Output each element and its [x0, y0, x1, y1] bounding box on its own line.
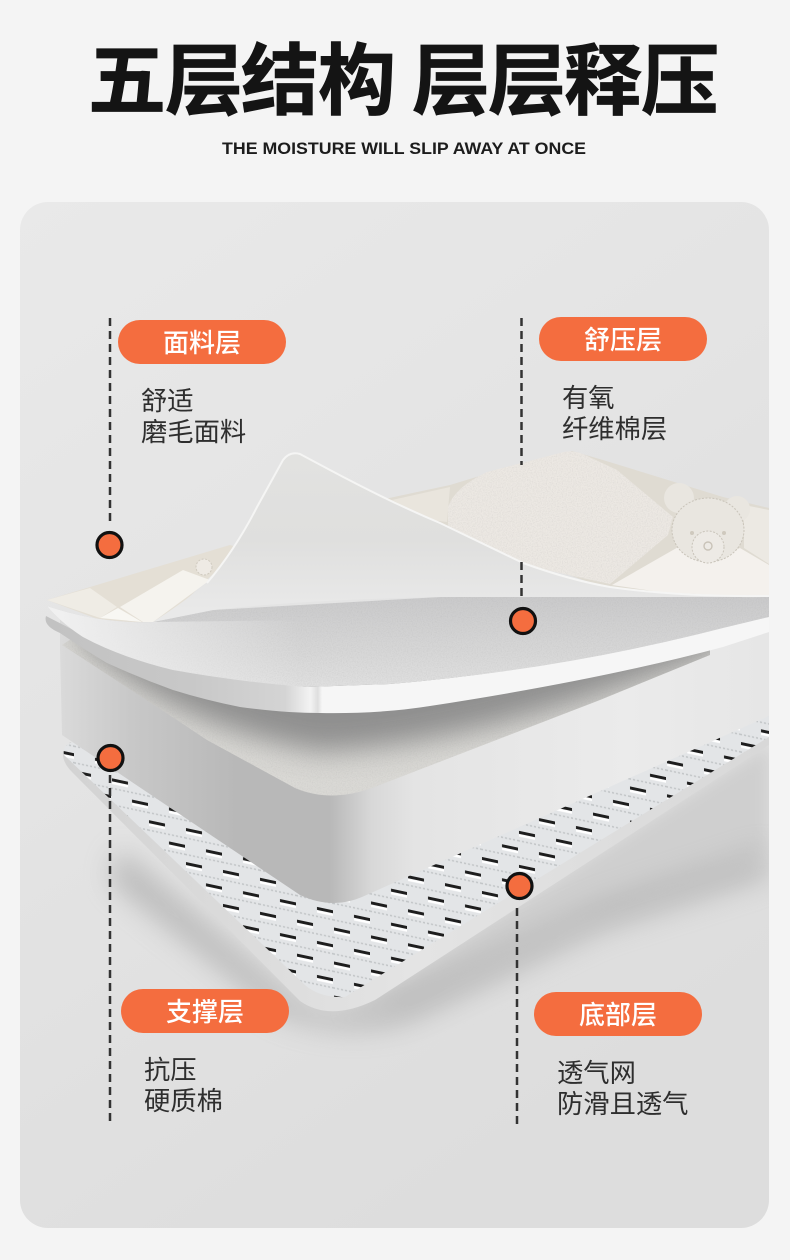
left small quilt panel: [392, 487, 450, 522]
marker dot: [510, 608, 536, 634]
label pill: [539, 317, 707, 361]
title: 五层结构层层释压: [88, 37, 719, 125]
right corner quilt panel: [744, 505, 769, 564]
description line 2: 纤维棉层: [562, 414, 667, 444]
mattress layers illustration: [46, 451, 769, 1028]
label text: 面料层: [163, 328, 241, 358]
description line 1: 抗压: [144, 1055, 197, 1085]
description line 1: 透气网: [557, 1058, 636, 1088]
left corner quilt panel: [47, 588, 117, 618]
description line 2: 磨毛面料: [141, 417, 246, 447]
underside highlight at left: [47, 606, 247, 677]
foam block side faces: [60, 620, 769, 903]
floor shadow: [110, 745, 769, 1028]
label text: 支撑层: [166, 997, 244, 1027]
panel: 底部层 callout: [507, 874, 702, 1126]
bottom diamond quilt panel: [100, 608, 142, 622]
face fabric on left: [47, 545, 240, 625]
dashed leader line: [109, 775, 111, 1126]
dashed leader line: [109, 318, 111, 524]
label pill: [121, 989, 289, 1033]
comfort layer fabric on right: [380, 451, 769, 598]
shadow cast on foam by top layer: [67, 640, 710, 768]
bottom layer plate edge: [63, 742, 606, 1011]
bottom layer: breathable mesh: [64, 716, 769, 997]
subtitle: THE MOISTURE WILL SLIP AWAY AT ONCE: [222, 139, 586, 158]
flap highlighted rim: [207, 453, 769, 596]
lower right quilt panel: [612, 546, 769, 598]
panel: 面料层 callout: [97, 318, 286, 558]
label pill: [118, 320, 286, 364]
small bear stitches: [196, 559, 212, 575]
label text: 底部层: [579, 1000, 657, 1030]
description line 2: 防滑且透气: [557, 1089, 688, 1119]
dashed leader line: [516, 908, 518, 1126]
top layer curled flap: [154, 499, 731, 622]
bear quilt icon: [664, 483, 750, 563]
marker dot: [507, 874, 532, 898]
marker dot: [98, 746, 123, 770]
description line 1: 有氧: [562, 383, 615, 413]
support layer foam top: [62, 640, 710, 796]
panel: grey background card: [20, 202, 769, 1228]
quilted diamond panel: [448, 451, 673, 584]
panel: 支撑层 callout: [98, 746, 289, 1126]
panel: 舒压层 callout: [510, 317, 707, 634]
marker dot: [97, 532, 122, 558]
dashed leader line upper: [520, 318, 523, 465]
label text: 舒压层: [584, 325, 662, 355]
top layer underside surface: [47, 596, 769, 687]
dashed leader line lower: [520, 562, 523, 600]
description line 2: 硬质棉: [144, 1086, 223, 1116]
lower quilt panel: [120, 570, 210, 622]
label pill: [534, 992, 702, 1036]
description line 1: 舒适: [141, 386, 194, 416]
top layer thick edge: [46, 612, 769, 713]
